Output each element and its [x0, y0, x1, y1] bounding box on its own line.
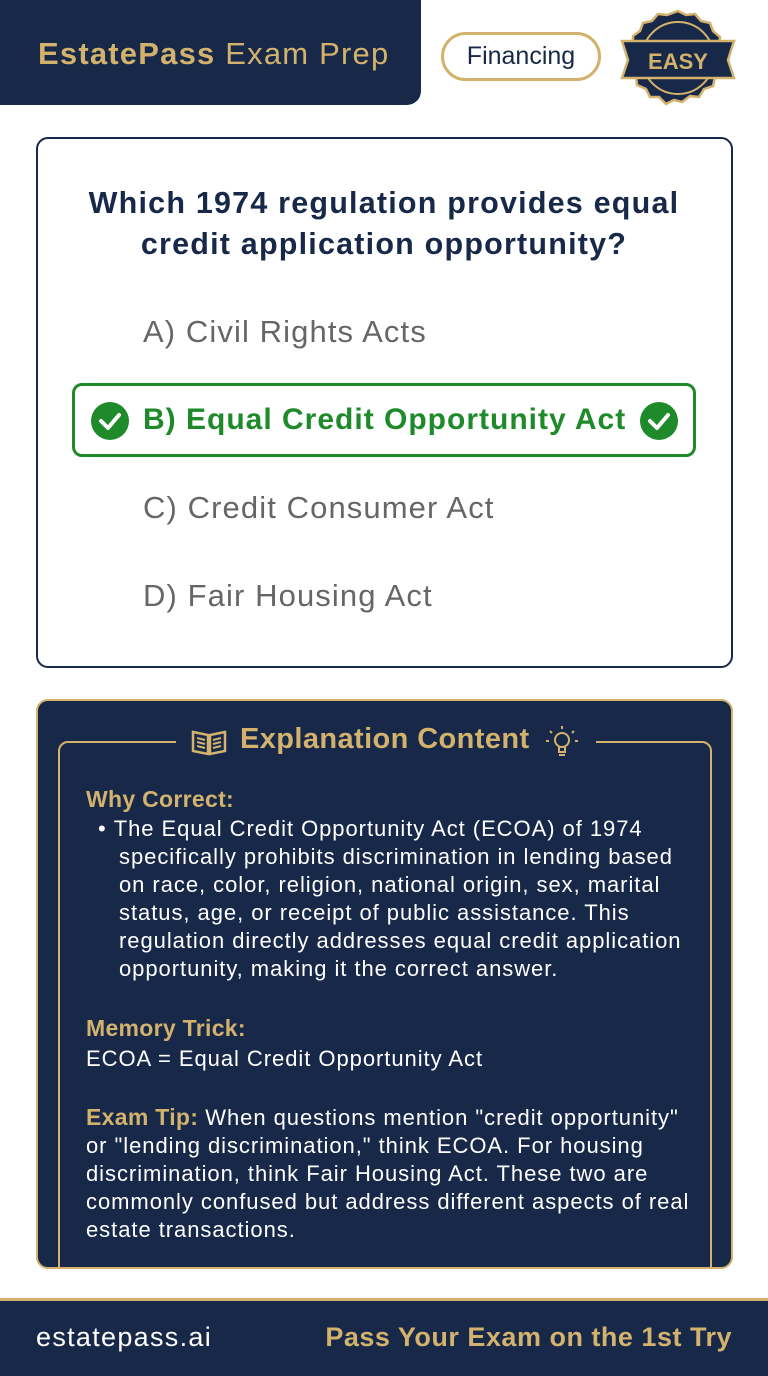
why correct text: on race, color, religion, national origin, sex, marital [119, 872, 660, 897]
header bar [0, 0, 421, 105]
exam tip [86, 1104, 689, 1242]
option B correct [72, 383, 696, 457]
why correct label: Why Correct: [86, 786, 234, 812]
option A: A) Civil Rights Acts [143, 314, 427, 349]
check icon right [640, 402, 678, 440]
why correct text: regulation directly addresses equal credit application [119, 928, 682, 953]
explanation panel [36, 699, 733, 1269]
difficulty badge: EASY [648, 49, 708, 74]
icon: lightbulb [546, 726, 578, 756]
category pill [441, 32, 601, 81]
check icon left [91, 402, 129, 440]
icon: book [192, 730, 226, 756]
footer url: estatepass.ai [36, 1322, 212, 1352]
option B text: B) Equal Credit Opportunity Act [143, 403, 626, 436]
why correct text: • The Equal Credit Opportunity Act (ECOA) of 1974 [98, 816, 643, 841]
why correct text: opportunity, making it the correct answer. [119, 956, 558, 981]
footer tagline: Pass Your Exam on the 1st Try [325, 1322, 732, 1352]
heading: Explanation Content [240, 723, 530, 755]
question: credit application opportunity? [141, 227, 627, 261]
exam tip: commonly confused but address different aspects of real [86, 1189, 689, 1214]
title: EstatePass Exam Prep [38, 36, 389, 71]
exam tip: estate transactions. [86, 1217, 296, 1242]
memory trick [86, 1015, 483, 1071]
why correct text: status, age, or receipt of public assistance. This [119, 900, 630, 925]
why correct text: specifically prohibits discrimination in lending based [119, 844, 673, 869]
question card [36, 137, 733, 668]
difficulty badge [620, 10, 736, 106]
question [88, 186, 679, 261]
footer [0, 1298, 768, 1376]
exam tip: Exam Tip: When questions mention "credit opportunity" [86, 1104, 679, 1130]
memory trick: Memory Trick: [86, 1015, 246, 1041]
exam tip: discrimination, think Fair Housing Act. These two are [86, 1161, 648, 1186]
category pill: Financing [467, 42, 575, 70]
option D: D) Fair Housing Act [143, 578, 433, 613]
option C: C) Credit Consumer Act [143, 490, 495, 525]
why correct text [98, 816, 682, 981]
memory trick: ECOA = Equal Credit Opportunity Act [86, 1046, 483, 1071]
exam tip: or "lending discrimination," think ECOA. For housing [86, 1133, 644, 1158]
question: Which 1974 regulation provides equal [89, 186, 679, 220]
